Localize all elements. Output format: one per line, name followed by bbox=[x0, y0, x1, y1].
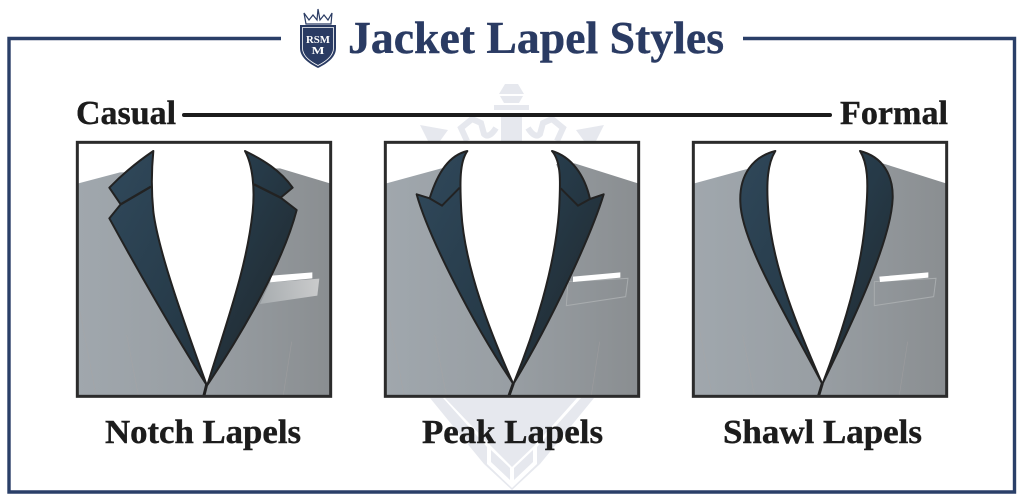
panel border bbox=[385, 142, 639, 396]
pocket bbox=[874, 272, 936, 306]
pocket bbox=[566, 272, 628, 306]
jacket body bbox=[694, 163, 946, 396]
right lapel bbox=[823, 151, 893, 383]
title: Jacket Lapel Styles bbox=[348, 12, 724, 63]
crown bbox=[304, 9, 332, 24]
scale line bbox=[184, 113, 830, 117]
left lapel bbox=[109, 151, 207, 385]
panel: shawl lapels bbox=[693, 142, 947, 397]
panel border bbox=[693, 142, 947, 396]
caption: notch lapels: Notch Lapels bbox=[105, 414, 301, 451]
right lapel bbox=[207, 151, 297, 385]
left lapel bbox=[740, 151, 822, 383]
shirt opening bbox=[152, 144, 254, 385]
monogram: M bbox=[312, 45, 325, 57]
shirt opening bbox=[460, 144, 560, 383]
watermark crest bbox=[420, 84, 604, 490]
panel: peak lapels bbox=[385, 142, 639, 397]
shield bbox=[300, 25, 336, 68]
logo: crest shield bbox=[300, 9, 336, 68]
shirt opening bbox=[767, 144, 867, 383]
caption: shawl lapels: Shawl Lapels bbox=[723, 414, 922, 451]
left lapel bbox=[417, 151, 513, 383]
monogram bbox=[306, 35, 331, 57]
panel border bbox=[77, 142, 331, 396]
pocket bbox=[260, 272, 319, 304]
scale: casual to formal bbox=[76, 95, 948, 132]
jacket body bbox=[386, 163, 638, 396]
right lapel bbox=[514, 151, 604, 383]
jacket body bbox=[78, 168, 330, 396]
panel: notch lapels bbox=[77, 142, 331, 397]
monogram: RSM bbox=[306, 35, 331, 46]
label: formal: Formal bbox=[840, 95, 948, 132]
label: casual: Casual bbox=[76, 95, 176, 132]
caption: peak lapels: Peak Lapels bbox=[422, 414, 603, 451]
